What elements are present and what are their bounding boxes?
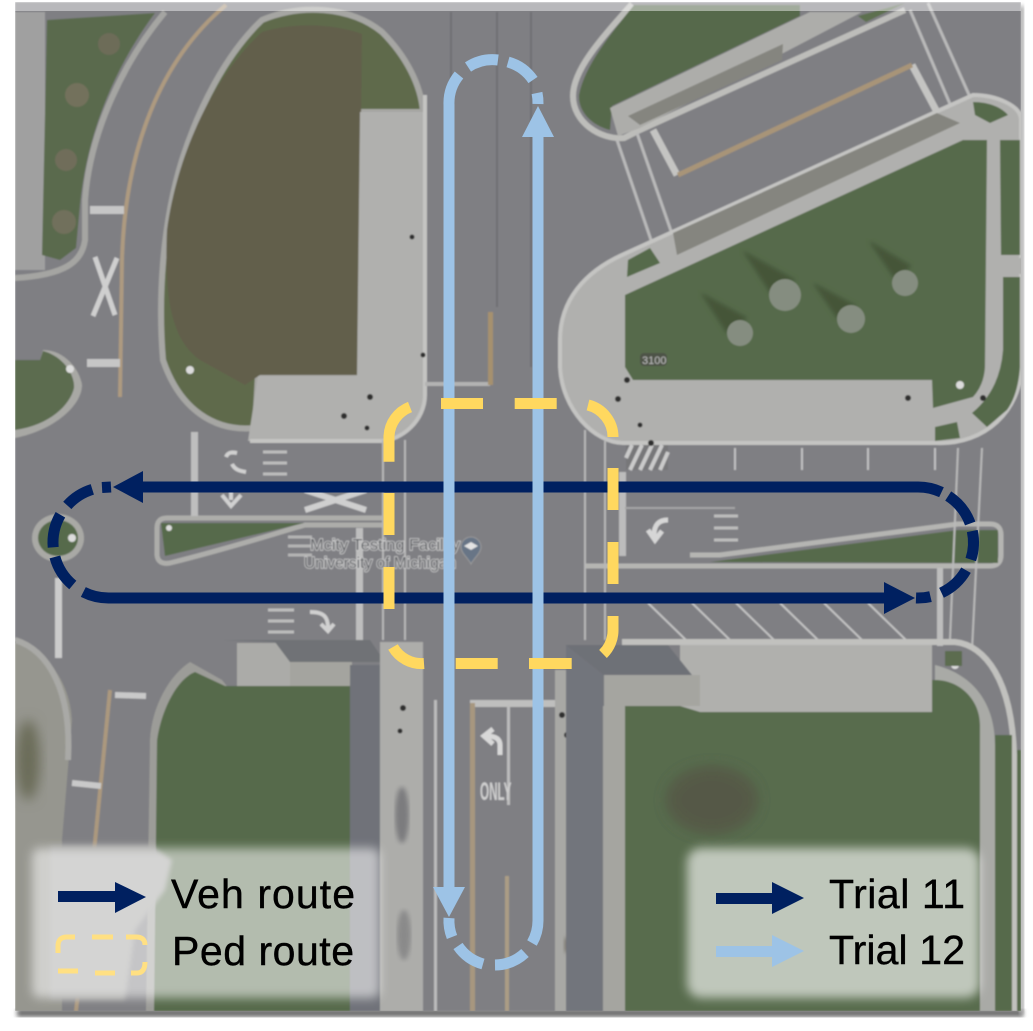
- blue arrowhead south: [433, 887, 465, 917]
- trial 11 route (navy): [53, 471, 974, 614]
- trial 12 arrow: [716, 935, 804, 967]
- navy arrowhead east: [884, 582, 915, 614]
- crosswalk hatch: [626, 445, 668, 470]
- sidewalk bollards: [341, 234, 986, 751]
- north road markings: [425, 12, 532, 397]
- navy arrowhead west: [113, 471, 143, 503]
- west small green island: [15, 350, 82, 438]
- curved road centre line and stop bars: [87, 5, 226, 397]
- map label: Mcity Testing Facility: University of Michigan: [304, 555, 456, 572]
- map label: Mcity Testing Facility: Mcity Testing Facility: [310, 537, 460, 554]
- north-east green patch and sidewalk: [573, 3, 905, 138]
- veh route arrow: [58, 882, 146, 913]
- south-east block: [566, 642, 1021, 1011]
- left legend backing: [32, 848, 380, 998]
- trial 11 arrow: [716, 882, 804, 914]
- north-east angled road: [617, 3, 970, 240]
- intersection crosswalk lines: [383, 430, 605, 640]
- west median: [157, 518, 383, 563]
- legend: vehicle and pedestrian routes: [58, 871, 355, 974]
- blue arrowhead north: [522, 106, 554, 137]
- north-west green block: [15, 12, 165, 278]
- west road markings: [55, 432, 366, 658]
- south-west block: [15, 640, 423, 1011]
- map pin icon: [461, 537, 481, 564]
- trial 12 route (light blue): [433, 60, 554, 965]
- ped route dashed swatch: [58, 937, 145, 973]
- brown bench patches beside south road: [563, 936, 566, 954]
- south road markings: ONLY: [480, 778, 511, 806]
- west roundabout island: [32, 514, 84, 562]
- veh route label: Veh route: [171, 871, 355, 917]
- south road markings: [434, 670, 566, 1011]
- trees and shadows: [700, 240, 918, 346]
- trial 11 label: Trial 11: [829, 871, 965, 917]
- east approach markings and median: [585, 448, 1001, 650]
- map label: Mcity Testing Facility: [304, 537, 460, 572]
- pedestrian route (yellow dashed): [389, 404, 613, 664]
- left legend irregular sidewalk: [50, 845, 172, 1000]
- ped route label: Ped route: [172, 928, 354, 974]
- trial 12 label: Trial 12: [829, 927, 965, 973]
- lamp posts: [66, 365, 964, 669]
- map label: 3100: 3100: [642, 355, 666, 367]
- east triangular park: [560, 95, 1022, 443]
- top edge light band: [15, 2, 1021, 11]
- legend: trials: [716, 871, 965, 973]
- brown field and corner sidewalk: [161, 10, 425, 441]
- right legend backing: [687, 848, 980, 998]
